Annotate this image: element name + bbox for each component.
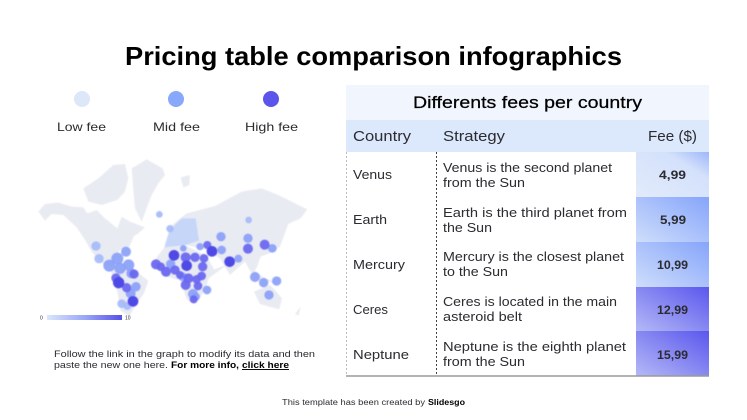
legend [57,91,298,134]
note text [54,349,315,371]
row: Neptune [353,331,709,376]
row: Mercury: Mercury [353,257,406,272]
note text: Follow the link in the graph to modify its data and then [54,349,315,360]
legend: high fee: High fee [245,120,298,134]
row: Neptune: 15,99 [657,350,688,362]
row: Neptune: from the Sun [443,354,525,369]
Europe highlighted [164,218,199,247]
row: Earth [353,197,709,242]
row: Venus: Venus [353,167,393,182]
table title: Differents fees per country [413,93,643,112]
title: Pricing table comparison infographics [125,41,622,71]
legend: low fee [57,91,106,134]
world map with fee bubbles [38,159,307,317]
row: Mercury [353,242,709,287]
map colour scale [40,315,131,322]
row: Earth: the Sun [443,220,492,235]
row: Earth: 5,99 [660,215,686,227]
footer credit [282,398,465,407]
table header: Country [353,128,412,145]
map colour scale: 0 [40,316,43,322]
footer credit: This template has been created by [282,398,425,407]
row: Neptune: Neptune [353,347,409,362]
row: Earth: Earth [353,212,387,227]
note text: For more info, [171,360,239,371]
table header: Fee ($) [648,128,697,145]
row: Mercury: Mercury is the closest planet [443,249,624,264]
row: Ceres [353,287,709,331]
note text: click here [242,360,289,371]
row: Venus: Venus is the second planet [443,160,612,175]
row: Ceres: asteroid belt [443,309,522,324]
table header: Strategy [443,128,506,145]
pricing table [346,85,709,376]
row: Neptune: Neptune is the eighth planet [443,339,626,354]
row: Venus [353,152,709,197]
map colour scale: 10 [125,316,131,322]
bubbles [91,211,281,310]
row: Venus: 4,99 [659,170,686,182]
row: Ceres: 12,99 [657,305,688,317]
legend: low fee: Low fee [57,120,106,134]
footer credit: Slidesgo [428,398,465,407]
legend: mid fee [153,91,200,134]
row: Mercury: 10,99 [657,260,688,272]
row: Earth: Earth is the third planet from [443,205,627,220]
note text: paste the new one here. [54,360,168,371]
legend: mid fee: Mid fee [153,120,200,134]
row: Ceres: Ceres is located in the main [443,294,617,309]
row: Ceres: Ceres [353,302,388,317]
table title [346,85,709,120]
land masses [38,159,307,317]
legend: high fee [245,91,298,134]
table header [346,120,709,152]
row: Mercury: to the Sun [443,264,508,279]
row: Venus: from the Sun [443,175,525,190]
